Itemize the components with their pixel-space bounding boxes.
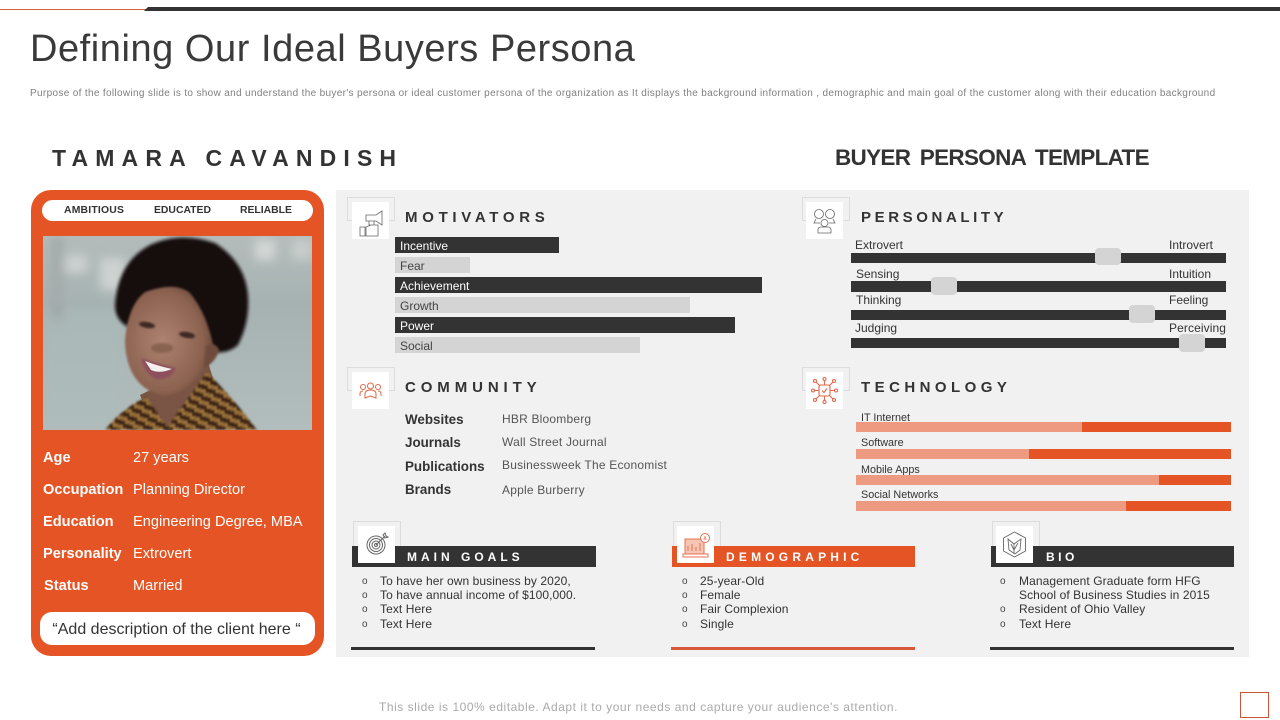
technology bars: Social Networks [861, 489, 938, 501]
page number box [1240, 692, 1269, 718]
icon: target [358, 526, 395, 563]
list: 25-year-Old [700, 574, 764, 588]
profile facts: Married [133, 578, 182, 594]
list: o [682, 576, 688, 587]
icon: faces [806, 202, 843, 239]
ear and jaw shadow [204, 344, 219, 368]
list: Fair Complexion [700, 602, 789, 616]
panel: details background [336, 190, 1249, 657]
community list: Businessweek The Economist [502, 458, 667, 472]
quote pill: “Add description of the client here “ [52, 621, 301, 638]
hair [115, 237, 248, 352]
footer note: This slide is 100% editable. Adapt it to your needs and capture your audience's attention. [379, 700, 898, 714]
technology bars: IT Internet [861, 412, 910, 424]
list: o [362, 619, 368, 630]
personality sliders: Sensing [856, 267, 899, 281]
profile facts: Personality [43, 546, 122, 562]
technology bars: Mobile Apps [861, 464, 920, 476]
motivators bar chart: Growth [400, 299, 439, 313]
profile facts: Education [43, 514, 114, 530]
header bar: MAIN GOALS [407, 550, 524, 564]
section: personality [802, 197, 1007, 239]
icon: network chip [806, 372, 843, 409]
icon: chart on book [677, 526, 714, 563]
list: School of Business Studies in 2015 [1019, 588, 1210, 602]
face [125, 287, 214, 396]
card: bio [990, 521, 1234, 650]
subtitle text: Purpose of the following slide is to show and understand the buyer's persona or ideal customer persona of the organization as It displays the background information , demographic and main goal of the customer along with their education background [30, 88, 1215, 99]
profile facts: Planning Director [133, 482, 245, 498]
header bar: BIO [1046, 550, 1078, 564]
personality sliders [851, 238, 1226, 352]
icon: people group [352, 372, 389, 409]
motivators bar chart: Fear [400, 259, 425, 273]
header bar [672, 546, 915, 567]
list: To have annual income of $100,000. [380, 588, 576, 602]
header bar [352, 546, 596, 567]
heading: template name: BUYER PERSONA TEMPLATE [835, 145, 1149, 170]
heading: MOTIVATORS [405, 209, 550, 226]
motivators bar chart: Social [400, 339, 433, 353]
title: Defining Our Ideal Buyers Persona [30, 28, 635, 70]
personality sliders: Perceiving [1169, 321, 1226, 335]
list: To have her own business by 2020, [380, 574, 571, 588]
motivators bar chart [395, 237, 762, 353]
community list: Apple Burberry [502, 483, 585, 497]
heading: TECHNOLOGY [861, 379, 1011, 396]
icon: megaphone and thumb [352, 202, 389, 239]
card: demographic [671, 521, 915, 650]
list [1000, 574, 1210, 631]
community list: Brands [405, 482, 451, 497]
personality sliders: Feeling [1169, 293, 1208, 307]
list: o [682, 619, 688, 630]
profile facts: Extrovert [133, 546, 191, 562]
list: Text Here [1019, 617, 1071, 631]
list [362, 574, 576, 631]
heading: COMMUNITY [405, 379, 542, 396]
community list: Websites [405, 412, 464, 427]
list: Female [700, 588, 740, 602]
list: o [1000, 619, 1006, 630]
list: o [362, 576, 368, 587]
personality sliders: Intuition [1169, 267, 1211, 281]
profile facts: Engineering Degree, MBA [133, 514, 303, 530]
traits pill [42, 200, 313, 221]
community list: Journals [405, 435, 461, 450]
mouth [141, 358, 176, 379]
list: o [682, 590, 688, 601]
community list: Publications [405, 459, 485, 474]
profile facts: 27 years [133, 450, 189, 466]
list: Text Here [380, 602, 432, 616]
list: Single [700, 617, 734, 631]
personality sliders: Introvert [1169, 238, 1213, 252]
community list [405, 412, 667, 497]
profile facts: Status [44, 578, 89, 594]
heading: PERSONALITY [861, 209, 1007, 226]
quote pill [40, 612, 315, 645]
icon: hexagon fox [996, 526, 1033, 563]
portrait photo [43, 236, 312, 430]
section: technology [802, 367, 1011, 409]
header bar [991, 546, 1234, 567]
nose shadow [151, 343, 173, 353]
traits pill: RELIABLE [240, 205, 292, 216]
list: o [362, 604, 368, 615]
eyes [139, 321, 155, 329]
neck [140, 362, 215, 430]
top rule [0, 7, 1280, 11]
section: community [347, 367, 667, 497]
panel: profile card [31, 190, 324, 656]
collar [105, 397, 172, 430]
personality sliders: Judging [855, 321, 897, 335]
profile facts: Age [43, 450, 71, 466]
card: main goals [351, 521, 596, 650]
header bar: DEMOGRAPHIC [726, 550, 864, 564]
technology bars: Software [861, 437, 904, 449]
list: o [1000, 576, 1006, 587]
list: Management Graduate form HFG [1019, 574, 1201, 588]
traits pill: EDUCATED [154, 205, 211, 216]
motivators bar chart: Achievement [400, 279, 469, 293]
technology bars [856, 412, 1231, 511]
personality sliders: Thinking [856, 293, 901, 307]
motivators bar chart: Power [400, 319, 434, 333]
list: o [682, 604, 688, 615]
community list: Wall Street Journal [502, 435, 607, 449]
list: Resident of Ohio Valley [1019, 602, 1145, 616]
community list: HBR Bloomberg [502, 412, 591, 426]
traits pill: AMBITIOUS [64, 205, 124, 216]
profile facts: Occupation [43, 482, 123, 498]
personality sliders: Extrovert [855, 238, 903, 252]
list: Text Here [380, 617, 432, 631]
heading: persona name: TAMARA CAVANDISH [52, 145, 403, 171]
list [682, 574, 789, 631]
section: motivators [347, 197, 550, 239]
list: o [362, 590, 368, 601]
profile facts [43, 450, 303, 594]
list: o [1000, 604, 1006, 615]
motivators bar chart: Incentive [400, 239, 448, 253]
